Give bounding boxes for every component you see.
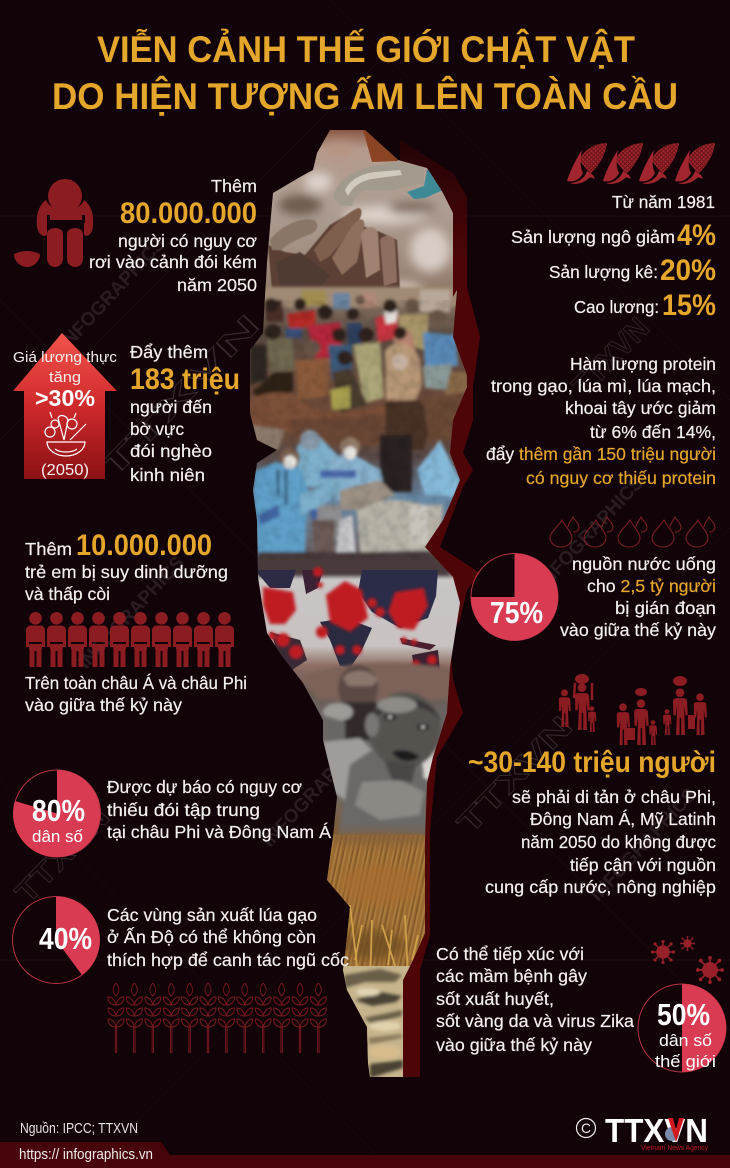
footer band bbox=[0, 1142, 730, 1168]
icon row: wheat bbox=[108, 983, 326, 1053]
text: 80 million: rơi vào cảnh đói kém bbox=[89, 252, 257, 272]
pie: 50% bbox=[638, 984, 726, 1072]
text: disease exposure: Có thể tiếp xúc với bbox=[436, 944, 584, 964]
pie: 50%: dân số bbox=[659, 1032, 712, 1050]
pie: 75% bbox=[471, 554, 558, 640]
text: food price: tăng bbox=[49, 370, 81, 386]
text: disease exposure: các mầm bệnh gây bbox=[436, 966, 587, 986]
text: 80 million: Thêm bbox=[211, 176, 257, 196]
block: food price arrow bbox=[13, 333, 117, 479]
text: migration details: năm 2050 do không được bbox=[521, 832, 716, 852]
text: hunger forecast: thiếu đói tập trung bbox=[107, 800, 260, 820]
stat: sorghum yield: Cao lương: bbox=[574, 297, 659, 317]
stat: sorghum yield: 15% bbox=[662, 289, 716, 322]
stat: millet yield: 20% bbox=[660, 254, 716, 287]
text: 183 million: 183 triệu bbox=[130, 363, 240, 396]
text: drinking water: bị gián đoạn bbox=[615, 598, 716, 618]
photo: crowd and medic texture bbox=[248, 300, 470, 560]
pie: 80%: dân số bbox=[32, 827, 84, 846]
photo: world map bbox=[255, 567, 440, 676]
icon row: water drops bbox=[550, 517, 715, 547]
photo: cracked earth bbox=[340, 966, 410, 1080]
stat: sorghum yield bbox=[574, 289, 716, 322]
pie: 50%: 50% bbox=[657, 997, 710, 1032]
stat: millet yield: Sản lượng kê: bbox=[549, 262, 658, 282]
text: disease exposure: sốt xuất huyết, bbox=[436, 989, 554, 1009]
text: drinking water: vào giữa thế kỷ này bbox=[560, 620, 716, 640]
text: drinking water: nguồn nước uống bbox=[572, 554, 716, 574]
source: Nguồn: IPCC; TTXVN bbox=[20, 1121, 138, 1137]
text: drinking water: cho 2,5 tỷ người bbox=[587, 576, 716, 596]
text: children stunting bbox=[25, 529, 228, 604]
logo: TTXVN: Vietnam News Agency bbox=[641, 1145, 708, 1152]
stat: corn yield: 4% bbox=[677, 219, 716, 252]
text: children stunting: 10.000.000 bbox=[76, 529, 212, 562]
text: rice regions bbox=[107, 905, 349, 970]
pie: 40%: 40% bbox=[39, 921, 92, 956]
text: 183 million: kinh niên bbox=[130, 465, 205, 485]
text: protein content: Hàm lượng protein bbox=[570, 354, 716, 374]
text: rice regions: thích hợp để canh tác ngũ cốc bbox=[107, 950, 349, 970]
photo: dry rice field bbox=[327, 828, 426, 972]
text: protein content: từ 6% đến 14%, bbox=[590, 422, 716, 442]
text: food price: (2050) bbox=[41, 462, 89, 479]
text: food price bbox=[13, 350, 117, 479]
pie: 50%: thế giới bbox=[655, 1053, 716, 1071]
title: DO HIỆN TƯỢNG ẤM LÊN TOÀN CẦU bbox=[52, 75, 678, 117]
block: 80% population bbox=[13, 770, 331, 857]
arrow: food price up bbox=[13, 333, 117, 479]
text: migration details: Đông Nam Á, Mỹ Latinh bbox=[530, 809, 716, 829]
text: migration details: cung cấp nước, nông nghiệp bbox=[485, 877, 716, 897]
footer band: https:// infographics.vn bbox=[19, 1146, 153, 1163]
photo: crowd of children bbox=[250, 287, 467, 450]
text: hunger forecast bbox=[107, 777, 331, 842]
icon row: children bbox=[26, 612, 234, 667]
icon: vegetable bowl bbox=[45, 412, 86, 456]
icon row: corn bbox=[567, 143, 715, 184]
block: 40% rice regions bbox=[12, 896, 349, 1053]
watermarks: TTXVN bbox=[9, 801, 116, 910]
photo collage bbox=[250, 130, 467, 1077]
pie: 80%: 80% bbox=[32, 793, 85, 828]
text: migration details: tiếp cận với nguồn bbox=[570, 855, 716, 875]
text: food price: Giá lương thực bbox=[13, 350, 117, 366]
stat: millet yield bbox=[549, 254, 716, 287]
text: 183 million: Đẩy thêm bbox=[130, 342, 208, 362]
text: rice regions: ở Ấn Độ có thể không còn bbox=[107, 926, 316, 947]
text: protein content bbox=[486, 354, 716, 488]
text: 80 million: năm 2050 bbox=[177, 275, 257, 295]
text: Asia and Africa bbox=[25, 673, 247, 715]
text: disease exposure bbox=[436, 944, 634, 1055]
text: 80 million: 80.000.000 bbox=[120, 197, 257, 230]
text: 80 million: người có nguy cơ bbox=[118, 231, 257, 251]
text: protein content: có nguy cơ thiếu protein bbox=[526, 468, 716, 488]
text: children stunting: trẻ em bị suy dinh dưỡng bbox=[25, 562, 228, 582]
text: 183 million: bờ vực bbox=[130, 419, 184, 439]
text: Asia and Africa: Trên toàn châu Á và châu Phi bbox=[25, 673, 247, 693]
watermarks: INFOGRAPHICS bbox=[55, 234, 170, 354]
text: protein content: khoai tây ước giảm bbox=[565, 398, 716, 418]
text: migration details bbox=[485, 787, 716, 897]
icon: hungry crouching person bbox=[37, 179, 93, 267]
watermarks: TTXVN bbox=[566, 312, 656, 403]
pie: 75%: 75% bbox=[490, 595, 543, 630]
watermarks: INFOGRAPHICS bbox=[533, 473, 648, 593]
text: hunger forecast: tại châu Phi và Đông Nam Á bbox=[107, 822, 331, 842]
text: disease exposure: vào giữa thế kỷ này bbox=[436, 1035, 592, 1055]
icon group: migrants bbox=[559, 674, 707, 745]
text: 80 million bbox=[89, 176, 257, 295]
stat: corn yield bbox=[511, 219, 716, 252]
icon group: viruses bbox=[651, 936, 724, 984]
text: 183 million: người đến bbox=[130, 397, 212, 417]
pie: 80% bbox=[13, 770, 100, 857]
central silhouette shadow bbox=[400, 140, 480, 1077]
watermarks: INFOGRAPHICS bbox=[258, 731, 373, 851]
text: children stunting: Thêm bbox=[25, 539, 72, 559]
text: 183 million bbox=[130, 342, 240, 485]
text: disease exposure: sốt vàng da và virus Zika bbox=[436, 1011, 634, 1031]
text: children stunting: và thấp còi bbox=[25, 584, 110, 604]
icon: empty bowl bbox=[14, 251, 40, 267]
text: hunger forecast: Được dự báo có nguy cơ bbox=[107, 777, 302, 797]
text: rice regions: Các vùng sản xuất lúa gạo bbox=[107, 905, 317, 925]
block: migration bbox=[468, 674, 716, 897]
photo: starving child bbox=[300, 663, 452, 835]
text: since 1981: Từ năm 1981 bbox=[612, 192, 715, 212]
text: protein content: đẩy thêm gần 150 triệu người bbox=[486, 444, 716, 464]
block: 80 million people bbox=[14, 176, 257, 295]
text: protein content: trong gạo, lúa mì, lúa mạch, bbox=[491, 376, 716, 396]
watermarks: INFOGRAPHICS bbox=[74, 553, 189, 673]
text: drinking water bbox=[560, 554, 716, 640]
watermarks: INFOGRAPHICS bbox=[586, 785, 701, 905]
logo: TTXVN: TTXVN bbox=[605, 1112, 708, 1149]
block: drinking water bbox=[471, 517, 716, 640]
text: 183 million: đói nghèo bbox=[130, 441, 212, 461]
title: VIỄN CẢNH THẾ GIỚI CHẬT VẬT bbox=[97, 28, 635, 70]
text: Asia and Africa: vào giữa thế kỷ này bbox=[25, 695, 182, 715]
text: food price: >30% bbox=[35, 385, 95, 411]
stat: corn yield: Sản lượng ngô giảm bbox=[511, 227, 675, 247]
title bbox=[52, 28, 678, 117]
logo: TTXVN: C bbox=[581, 1120, 591, 1136]
block: 10 million children bbox=[25, 529, 247, 715]
text: migration details: sẽ phải di tản ở châu Phi, bbox=[512, 787, 716, 807]
block: disease bbox=[436, 936, 726, 1072]
block: crop yields bbox=[511, 143, 716, 322]
watermarks: TTXVN bbox=[451, 710, 579, 841]
photo: medical workers bbox=[253, 430, 460, 575]
pie: 40% bbox=[12, 896, 100, 984]
watermarks: TTXVN bbox=[93, 308, 266, 486]
photo: faucet and cupped hands bbox=[268, 130, 450, 299]
